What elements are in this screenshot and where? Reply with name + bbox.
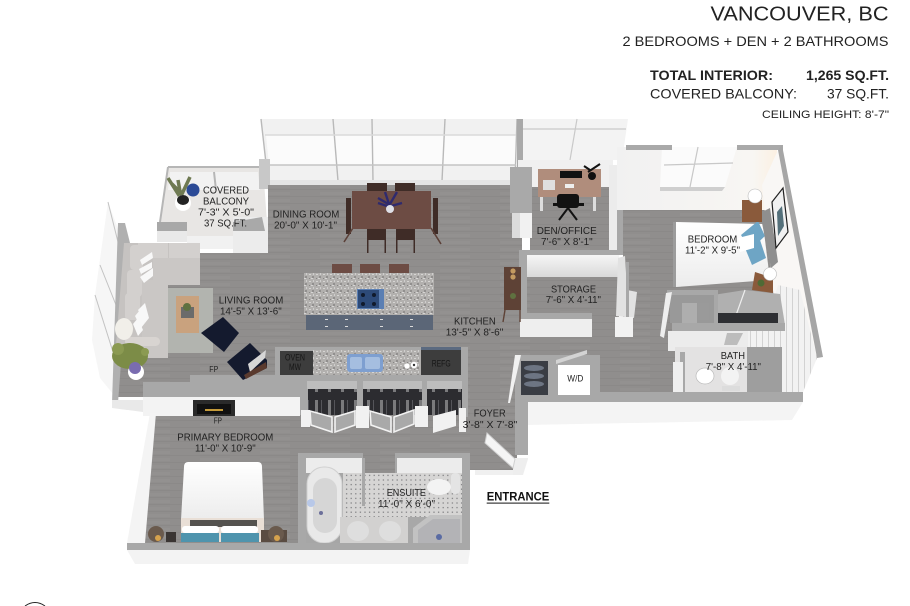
label: dining room: 20'-0" X 10'-1" bbox=[274, 221, 337, 232]
label: covered balcony: 7'-3" X 5'-0" bbox=[198, 208, 254, 219]
laptop bbox=[543, 180, 555, 190]
label: storage: 7'-6" X 4'-11" bbox=[546, 295, 601, 306]
cooktop bbox=[357, 289, 384, 309]
label: bath: BATH bbox=[721, 351, 745, 362]
balcony plant bbox=[168, 177, 191, 211]
wall: living left bbox=[112, 223, 130, 403]
label: kitchen: KITCHEN bbox=[454, 317, 496, 328]
lamp bbox=[584, 164, 600, 180]
label: ensuite: ENSUITE bbox=[387, 488, 426, 499]
label: living room: 14'-5" X 13'-6" bbox=[220, 306, 282, 317]
label: washer dryer: W/D bbox=[567, 374, 584, 384]
text block: heading bbox=[622, 4, 888, 49]
foyer walls and door bbox=[475, 393, 528, 475]
label: oven and microwave: MW bbox=[289, 362, 301, 372]
label: ensuite bbox=[378, 488, 435, 510]
corner plant bbox=[112, 343, 149, 380]
text block: areas: TOTAL INTERIOR: bbox=[650, 67, 773, 83]
closet doors bbox=[310, 410, 414, 432]
label: primary bedroom: 11'-0" X 10'-9" bbox=[195, 444, 256, 455]
double vanity bbox=[340, 517, 408, 543]
label: living room: LIVING ROOM bbox=[219, 295, 283, 306]
primary bed bbox=[148, 462, 287, 542]
ensuite bbox=[298, 453, 470, 543]
den desk bbox=[538, 164, 601, 220]
kitchen counter bbox=[275, 347, 467, 378]
bathtub bbox=[307, 467, 342, 543]
text block: areas: CEILING HEIGHT: 8'-7" bbox=[762, 109, 889, 121]
windows: dining room bbox=[261, 119, 518, 185]
second bathroom bbox=[668, 331, 782, 392]
label: fireplace, living room: FP bbox=[209, 365, 218, 374]
living room rug bbox=[165, 288, 213, 353]
wall: south wall of hall bbox=[518, 392, 803, 425]
nightstand right bbox=[261, 526, 287, 542]
balcony flower bbox=[186, 184, 200, 196]
label: covered balcony bbox=[198, 186, 254, 230]
label: foyer: FOYER bbox=[474, 409, 506, 420]
text block: areas: COVERED BALCONY: bbox=[650, 86, 797, 102]
floor: storage bbox=[527, 277, 619, 321]
bolster bbox=[125, 337, 160, 346]
label: dining room: DINING ROOM bbox=[273, 210, 339, 221]
wardrobe closets bbox=[300, 347, 468, 433]
text block: heading: 2 BEDROOMS + DEN + 2 BATHROOMS bbox=[622, 33, 888, 49]
pillows bbox=[181, 526, 259, 542]
entry door bbox=[485, 433, 515, 468]
headboard bbox=[760, 208, 778, 268]
label: foyer bbox=[463, 409, 518, 431]
toilet bbox=[427, 473, 460, 495]
kitchen island bbox=[304, 264, 434, 330]
icon: fireplace bbox=[193, 400, 235, 416]
label: living room bbox=[219, 295, 283, 317]
console table bbox=[503, 267, 521, 322]
label: bath bbox=[706, 351, 761, 373]
label: fireplace, primary bedroom: FP bbox=[214, 417, 222, 426]
label: oven and microwave: OVEN bbox=[285, 353, 305, 363]
refrigerator bbox=[421, 347, 461, 375]
wall: second bedroom back wall and window bbox=[617, 145, 783, 210]
label: second bedroom: BEDROOM bbox=[688, 235, 737, 246]
text block: areas: 37 SQ.FT. bbox=[827, 86, 889, 102]
kitchen sink bbox=[347, 354, 383, 372]
second bedroom bed bbox=[673, 188, 788, 293]
nightstand bottom bbox=[752, 268, 776, 293]
label: kitchen: 13'-5" X 8'-6" bbox=[446, 328, 504, 339]
coffee table bbox=[176, 296, 199, 333]
wall: balcony right box bbox=[233, 217, 268, 253]
primary bedroom left wall bbox=[127, 413, 156, 543]
label: bath: 7'-8" X 4'-11" bbox=[706, 362, 761, 373]
label: dining room bbox=[273, 210, 339, 232]
pillows bbox=[738, 221, 766, 265]
text block: heading: VANCOUVER, BC bbox=[710, 4, 888, 26]
wall: den bbox=[510, 160, 623, 277]
shower bbox=[413, 515, 462, 543]
text block: areas: 1,265 SQ.FT. bbox=[806, 67, 889, 83]
label: entrance: ENTRANCE bbox=[487, 492, 550, 504]
wall: living / primary bedroom bbox=[112, 348, 300, 416]
label: oven and microwave bbox=[285, 353, 305, 372]
label: ensuite: 11'-0" X 6'-0" bbox=[378, 499, 435, 510]
text block: areas bbox=[650, 67, 889, 121]
oven and microwave bbox=[280, 351, 313, 375]
label: den office: DEN/OFFICE bbox=[537, 226, 597, 237]
icon: cropped logo arc bbox=[25, 602, 45, 606]
floor: den bbox=[530, 185, 614, 252]
label: covered balcony: 37 SQ.FT. bbox=[204, 219, 247, 230]
armchairs bbox=[201, 317, 267, 380]
label: primary bedroom: PRIMARY BEDROOM bbox=[177, 433, 273, 444]
monitor bbox=[560, 171, 582, 178]
sectional sofa bbox=[116, 243, 200, 358]
nightstand left bbox=[148, 526, 176, 542]
label: refrigerator: REFG bbox=[432, 359, 451, 369]
centerpiece bbox=[378, 192, 402, 213]
label: den office bbox=[537, 226, 597, 248]
wall: second bedroom right wall bbox=[762, 145, 823, 392]
wall: storage bbox=[519, 250, 637, 337]
windows: living room left bbox=[92, 202, 125, 400]
washer dryer bbox=[558, 365, 590, 395]
bath mirror bbox=[724, 333, 743, 345]
windows: den bbox=[517, 119, 628, 171]
countertop accessory bbox=[404, 362, 417, 369]
wall art bbox=[772, 188, 788, 248]
floor: hall and second bedroom bbox=[520, 210, 782, 393]
table bbox=[352, 191, 431, 229]
label: storage: STORAGE bbox=[551, 284, 596, 295]
nightstand top bbox=[742, 189, 762, 222]
dining set bbox=[344, 183, 441, 253]
covered balcony bbox=[157, 159, 270, 249]
label: primary bedroom bbox=[177, 433, 273, 455]
label: kitchen bbox=[446, 317, 504, 339]
floor lamp bbox=[115, 318, 133, 340]
floor: living, dining, kitchen, primary bedroom bbox=[113, 185, 522, 543]
label: second bedroom: 11'-2" X 9'-5" bbox=[685, 246, 740, 257]
label: second bedroom bbox=[685, 235, 740, 257]
label: foyer: 3'-8" X 7'-8" bbox=[463, 420, 518, 431]
washer dryer closet bbox=[508, 350, 600, 403]
bath sink bbox=[696, 368, 714, 384]
office chair bbox=[553, 194, 584, 220]
bath toilet bbox=[721, 367, 739, 385]
label: den office: 7'-6" X 8'-1" bbox=[541, 237, 593, 248]
second bedroom closet bbox=[660, 290, 785, 338]
primary bedroom south wall bbox=[127, 543, 470, 564]
label: storage bbox=[546, 284, 601, 306]
keyboard bbox=[565, 184, 574, 188]
sofa pillows bbox=[133, 252, 153, 336]
label: covered balcony: BALCONY bbox=[203, 197, 249, 208]
label: covered balcony: COVERED bbox=[203, 186, 249, 196]
